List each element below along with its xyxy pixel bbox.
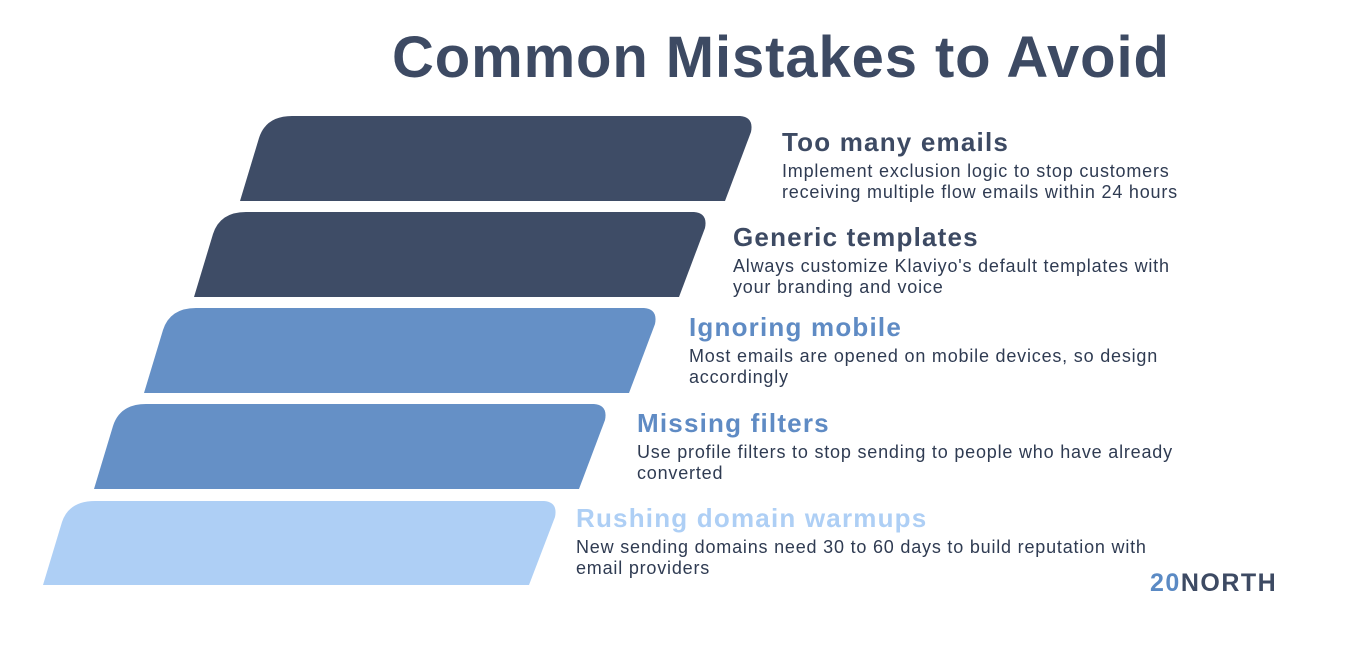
text: too many emails: [782, 127, 1178, 202]
text: too many emails: Too many emails: [782, 127, 1009, 157]
text: rushing domain warmups: New sending domains need 30 to 60 days to build reputation with: [576, 537, 1147, 557]
text: ignoring mobile: Most emails are opened on mobile devices, so design: [689, 346, 1158, 366]
bar 1: [240, 116, 752, 201]
bar 3: [144, 308, 656, 393]
text: missing filters: converted: [637, 463, 723, 483]
bar 5: [43, 501, 556, 585]
text: missing filters: [637, 408, 1173, 483]
text: generic templates: Generic templates: [733, 222, 979, 252]
text: ignoring mobile: [689, 312, 1158, 387]
text: too many emails: receiving multiple flow emails within 24 hours: [782, 182, 1178, 202]
text: generic templates: Always customize Klaviyo's default templates with: [733, 256, 1170, 276]
text: missing filters: Missing filters: [637, 408, 830, 438]
bar 2: [194, 212, 706, 297]
logo: 20NORTH: [1150, 569, 1277, 597]
bar 4: [94, 404, 606, 489]
title: Common Mistakes to Avoid: [392, 25, 1170, 90]
text: rushing domain warmups: [576, 503, 1147, 578]
text: ignoring mobile: Ignoring mobile: [689, 312, 902, 342]
text: too many emails: Implement exclusion logic to stop customers: [782, 161, 1170, 181]
text: generic templates: [733, 222, 1170, 297]
text: rushing domain warmups: Rushing domain warmups: [576, 503, 927, 533]
text: rushing domain warmups: email providers: [576, 558, 710, 578]
text: generic templates: your branding and voice: [733, 277, 944, 297]
text: ignoring mobile: accordingly: [689, 367, 789, 387]
text: missing filters: Use profile filters to stop sending to people who have already: [637, 442, 1173, 462]
